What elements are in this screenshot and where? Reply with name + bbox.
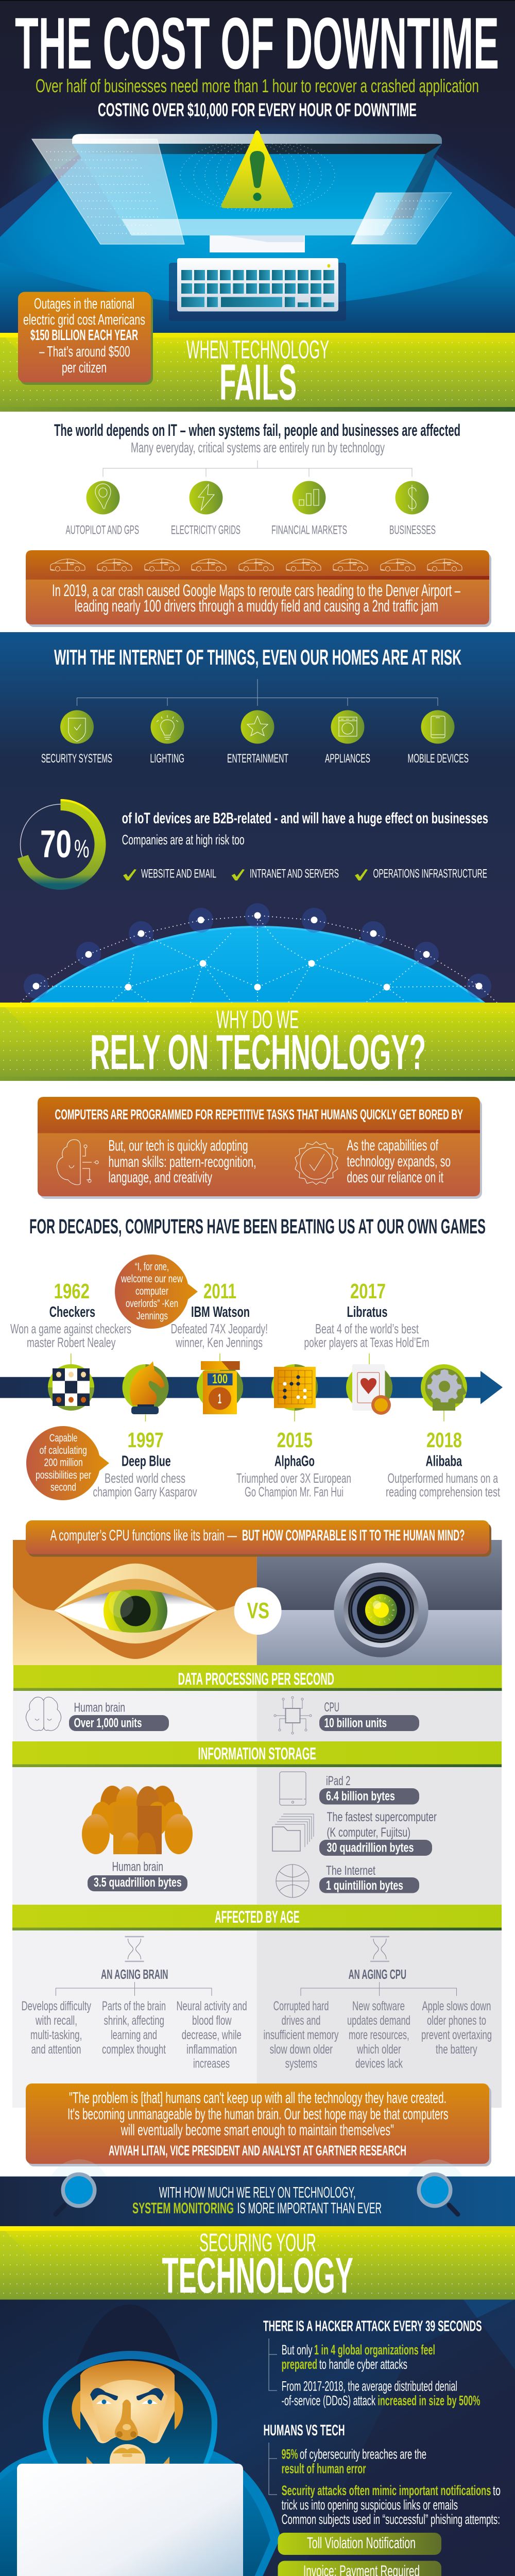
quote: Avivah Litan	[26, 2083, 491, 2166]
banner heading line: WHEN TECHNOLOGY	[186, 335, 329, 364]
text: brain effect shrink: Parts of the brain	[102, 1999, 166, 2013]
milestone: 2015 AlphaGo: Go Champion Mr. Fan Hui	[245, 1484, 344, 1499]
checklist: risk areas: INTRANET AND SERVERS	[250, 867, 339, 881]
panel: data processing per second	[13, 1665, 502, 1741]
icon: brain outline	[26, 1697, 61, 1731]
text: human skills: human skills: pattern-recognition,	[108, 1154, 256, 1171]
icon: iPad	[280, 1772, 306, 1805]
heading: aging brain: AN AGING BRAIN	[101, 1967, 168, 1982]
text: brain effect neural: decrease, while	[182, 2028, 242, 2042]
text: brain effect recall	[22, 1999, 91, 2057]
labels: critical systems: ELECTRICITY GRIDS	[171, 523, 241, 537]
text: capabilities: As the capabilities of	[347, 1137, 438, 1154]
icon: jeopardy podium	[197, 1361, 243, 1414]
text: iPad storage: iPad 2	[326, 1774, 350, 1788]
callout: national grid outages: Outages in the national	[34, 296, 134, 312]
callout: national grid outages: $150 BILLION EACH YEAR	[30, 327, 138, 344]
labels: IoT categories: MOBILE DEVICES	[408, 752, 469, 766]
icon: CPU chip	[274, 1697, 312, 1734]
labels: IoT categories: SECURITY SYSTEMS	[41, 752, 112, 766]
text: supercomputer storage: (K computer, Fujitsu)	[327, 1825, 410, 1840]
text: CPU effect software	[347, 1999, 410, 2071]
text: CPU effect Apple: the battery	[436, 2042, 477, 2057]
icon: go board	[271, 1364, 318, 1411]
callout: Deep Blue capability: of calculating	[39, 1445, 87, 1456]
milestone: 1962 Checkers: 1962	[54, 1279, 90, 1303]
milestone: 2011 IBM Watson	[171, 1279, 268, 1350]
text: internet storage: 1 quintillion bytes	[326, 1878, 403, 1893]
labels: IoT categories	[41, 752, 469, 766]
banner: system monitoring	[0, 2159, 515, 2226]
milestone: 1962 Checkers: master Robert Nealey	[27, 1334, 115, 1350]
icon: translucent window left	[32, 139, 184, 244]
text: attack stats: to handle cyber attacks	[319, 2357, 407, 2372]
milestone: 2017 Libratus: Libratus	[347, 1304, 387, 1320]
labels: IoT categories: APPLIANCES	[325, 752, 370, 766]
icon: badge check	[295, 1142, 338, 1184]
text: capabilities: technology expands, so	[347, 1153, 451, 1170]
icon: brain circuit	[57, 1140, 98, 1185]
labels: IoT categories: ENTERTAINMENT	[227, 752, 288, 766]
text: CPU effect hard drives: Corrupted hard	[273, 1999, 329, 2013]
subheading: critical systems: Many everyday, critical systems are entirely run by technology	[131, 439, 385, 455]
text: human brain storage: Human brain	[112, 1860, 163, 1874]
icon: businesses	[396, 481, 428, 514]
panel: data processing per second: DATA PROCESSING PER SECOND	[178, 1669, 334, 1688]
badge: VS: VS	[247, 1598, 269, 1623]
illustration: network dome	[21, 903, 497, 1003]
callout: national grid outages	[18, 292, 153, 385]
callout: national grid outages: electric grid cost Americans	[23, 312, 145, 328]
checklist: risk areas: WEBSITE AND EMAIL	[141, 867, 216, 881]
text: attack stats: prepared	[282, 2357, 317, 2372]
badge: VS	[234, 1587, 282, 1635]
text: human error stats: of cybersecurity breaches are the	[300, 2447, 426, 2462]
section banner: why do we rely on technology	[0, 1003, 515, 1081]
illustration: hooded hacker	[0, 2304, 281, 2576]
chart: 70 percent donut	[21, 800, 101, 885]
milestone: 2015 AlphaGo	[236, 1428, 351, 1499]
text: human brain speed: Over 1,000 units	[74, 1716, 142, 1730]
milestone: 2018 Alibaba: 2018	[426, 1428, 462, 1452]
text: brain effect recall: multi-tasking,	[30, 2028, 82, 2042]
text: CPU effect software: which older	[356, 2042, 401, 2057]
callout: national grid outages: – That’s around $500	[39, 344, 130, 360]
text: internet storage	[319, 1863, 419, 1893]
text: internet storage: The Internet	[326, 1863, 375, 1878]
labels: critical systems: FINANCIAL MARKETS	[271, 523, 347, 537]
icon: jeopardy podium: 1	[218, 1391, 221, 1406]
icon: autopilot and GPS	[87, 481, 119, 514]
icon: security systems	[60, 710, 94, 744]
text: CPU effect Apple	[421, 1999, 492, 2057]
section: internet of things	[0, 632, 515, 1003]
text: CPU effect hard drives: slow down older	[270, 2042, 333, 2057]
text: monitoring message: SYSTEM MONITORING	[132, 2200, 234, 2217]
text: supercomputer storage	[319, 1810, 437, 1856]
milestone: 1962 Checkers: Checkers	[49, 1304, 95, 1320]
text: brain effect neural	[176, 1999, 247, 2071]
section: hacker facts	[0, 2300, 515, 2576]
text: CPU effect hard drives: drives and	[282, 2013, 320, 2028]
icon: chess knight	[123, 1361, 169, 1414]
text: human brain speed: Human brain	[74, 1701, 125, 1715]
callout: Ken Jennings quote	[115, 1255, 198, 1329]
milestone: 2017 Libratus	[304, 1279, 430, 1350]
milestone: 2015 AlphaGo: 2015	[277, 1428, 313, 1452]
story text	[52, 581, 460, 615]
text: attack stats	[282, 2342, 480, 2408]
callout: Ken Jennings quote: Jennings	[136, 1310, 168, 1322]
callout: Ken Jennings quote: welcome our new	[121, 1273, 183, 1285]
text: brain effect shrink: complex thought	[102, 2042, 166, 2057]
text: brain effect neural: inflammation	[186, 2042, 237, 2057]
callout: Deep Blue capability: 200 million	[44, 1457, 83, 1468]
callout: Ken Jennings quote: overlords” -Ken	[126, 1298, 178, 1310]
section banner: securing your technology	[0, 2226, 515, 2303]
icon: mobile devices	[421, 710, 454, 744]
icon: entertainment	[241, 710, 274, 744]
text: human error stats: result of human error	[282, 2461, 366, 2477]
text: human brain speed	[69, 1701, 169, 1731]
text: human error stats	[282, 2447, 501, 2527]
milestone: 2017 Libratus: Beat 4 of the world’s best	[315, 1321, 419, 1336]
labels: critical systems: BUSINESSES	[389, 523, 436, 537]
icon: globe	[276, 1865, 309, 1897]
text: brain effect shrink	[102, 1999, 166, 2057]
text: CPU speed: CPU	[324, 1700, 339, 1715]
text: CPU effect Apple: older phones to	[427, 2013, 486, 2028]
chart: 70 percent donut: 70	[40, 822, 72, 866]
callout: Ken Jennings quote: “I, for one,	[135, 1261, 169, 1273]
text: human skills	[108, 1138, 256, 1186]
heading: humans vs tech: HUMANS VS TECH	[264, 2422, 345, 2439]
panel: affected by age: AFFECTED BY AGE	[215, 1907, 300, 1926]
heading: aging CPU: AN AGING CPU	[349, 1967, 406, 1982]
text: human error stats: to	[493, 2483, 501, 2498]
icon: head with gear	[421, 1364, 467, 1411]
icon: lighting	[150, 710, 184, 744]
text: CPU effect software: updates demand	[347, 2013, 410, 2028]
text: CPU effect software: New software	[352, 1999, 405, 2013]
labels: critical systems	[66, 523, 436, 537]
text: iPad storage	[319, 1774, 419, 1804]
milestone: 2011 IBM Watson: 2011	[203, 1279, 236, 1303]
milestone: 1997 Deep Blue	[93, 1428, 197, 1499]
text: human brain storage: 3.5 quadrillion bytes	[94, 1875, 182, 1890]
milestone: 2011 IBM Watson: Defeated 74X Jeopardy!	[171, 1321, 268, 1336]
callout: national grid outages: per citizen	[62, 360, 107, 376]
comparison: CPU lens panel	[257, 1540, 502, 1665]
icon: jeopardy podium: 100	[212, 1372, 228, 1386]
text: capabilities	[347, 1137, 451, 1186]
panel: information storage	[12, 1741, 502, 1905]
text: brain effect shrink: learning and	[111, 2028, 157, 2042]
text: companies risk: Companies are at high risk too	[122, 832, 245, 848]
text: monitoring message: WITH HOW MUCH WE RELY ON TECHNOLOGY,	[159, 2184, 356, 2201]
icon: keyboard	[169, 258, 346, 321]
text: human error stats: 95%	[282, 2447, 298, 2462]
icon: hourglass brain	[125, 1937, 144, 1961]
text: iPad storage: 6.4 billion bytes	[326, 1789, 395, 1803]
icon: computer monitor	[72, 134, 442, 252]
text: CPU effect software: devices lack	[355, 2057, 403, 2071]
labels: IoT categories: LIGHTING	[150, 752, 184, 766]
panel: car crash story	[26, 550, 491, 627]
icon: appliances	[331, 710, 365, 744]
text: attack stats: But only	[282, 2342, 313, 2358]
callout: Deep Blue capability	[26, 1426, 109, 1500]
text: monitoring message	[132, 2184, 382, 2217]
text: brain effect neural: increases	[193, 2057, 230, 2071]
milestone: 1962 Checkers: Won a game against checkers	[10, 1321, 131, 1336]
section banner: when technology fails	[0, 333, 515, 412]
milestone: 2017 Libratus: poker players at Texas Hold’Em	[304, 1334, 430, 1350]
milestone: 2015 AlphaGo: AlphaGo	[274, 1453, 315, 1469]
banner: CPU vs human mind	[26, 1520, 491, 1557]
timeline arrow	[0, 1371, 503, 1404]
text: CPU effect hard drives	[264, 1999, 339, 2071]
banner: CPU vs human mind: A computer’s CPU functions like its brain —	[50, 1527, 237, 1544]
milestone: 2018 Alibaba: Alibaba	[425, 1453, 462, 1469]
icon: financial markets	[293, 481, 325, 514]
text: CPU speed: 10 billion units	[324, 1716, 387, 1730]
milestone: 1997 Deep Blue: Deep Blue	[122, 1453, 171, 1469]
text: attack stats: -of-service (DDoS) attack	[282, 2393, 375, 2408]
text: CPU speed	[319, 1700, 419, 1731]
chart: 70 percent donut: %	[74, 835, 90, 863]
milestone: 1962 Checkers	[10, 1279, 131, 1350]
text: CPU effect software: more resources,	[349, 2028, 409, 2042]
button: invoice	[278, 2561, 441, 2576]
banner heading line: WHY DO WE	[216, 1006, 299, 1033]
checklist: risk areas	[123, 867, 487, 881]
milestone: 2011 IBM Watson: winner, Ken Jennings	[175, 1334, 263, 1350]
text: CPU effect hard drives: insufficient memory	[264, 2028, 339, 2042]
button: toll violation: Toll Violation Notification	[307, 2534, 416, 2552]
callout: Ken Jennings quote: computer	[135, 1285, 168, 1297]
callout: Deep Blue capability: possibilities per	[36, 1469, 91, 1481]
callout: Deep Blue capability: Capable	[49, 1432, 77, 1444]
icon: translucent window right	[351, 193, 452, 244]
text: brain effect neural: blood flow	[192, 2013, 232, 2028]
text: brain effect shrink: shrink, affecting	[104, 2013, 164, 2028]
text: attack stats: 1 in 4 global organizations feel	[314, 2342, 435, 2358]
labels: critical systems: AUTOPILOT AND GPS	[66, 523, 139, 537]
panel: information storage: INFORMATION STORAGE	[198, 1744, 316, 1763]
text: supercomputer storage: The fastest supercomputer	[327, 1810, 437, 1824]
milestone: 1997 Deep Blue: Bested world chess	[105, 1470, 185, 1486]
panel: repetitive tasks	[38, 1097, 482, 1199]
banner heading big word: FAILS	[219, 353, 297, 410]
text: CPU effect hard drives: systems	[285, 2057, 317, 2071]
milestone: 2017 Libratus: 2017	[350, 1279, 386, 1303]
comparison: human eye panel	[13, 1540, 257, 1665]
text: brain effect recall: Develops difficulty	[22, 1999, 91, 2013]
panel: affected by age	[12, 1905, 502, 2108]
icon: magnifier right	[417, 2172, 458, 2214]
icon: electricity grids	[190, 481, 222, 514]
text: human skills: But, our tech is quickly adopting	[108, 1138, 248, 1155]
icon: hourglass CPU	[370, 1937, 389, 1961]
text: human skills: language, and creativity	[108, 1169, 212, 1186]
timeline: computers vs humans at games	[0, 1255, 503, 1500]
icon: warning triangle	[221, 130, 293, 208]
banner heading line: SECURING YOUR	[199, 2229, 316, 2257]
milestone: 2018 Alibaba	[386, 1428, 501, 1499]
text: monitoring message: IS MORE IMPORTANT THAN EVER	[237, 2200, 382, 2217]
illustration: orange brain	[82, 1786, 193, 1854]
milestone: 1997 Deep Blue: 1997	[128, 1428, 164, 1452]
text: capabilities: does our reliance on it	[347, 1169, 443, 1186]
icon: file stack	[272, 1814, 314, 1851]
milestone: 2015 AlphaGo: Triumphed over 3X European	[236, 1470, 351, 1486]
banner heading big word: TECHNOLOGY	[162, 2247, 353, 2303]
callout: Deep Blue capability: second	[50, 1482, 76, 1494]
header panel	[0, 0, 515, 345]
icon: magnifier left	[56, 2172, 97, 2214]
milestone: 2011 IBM Watson: IBM Watson	[191, 1304, 250, 1320]
text: brain effect recall: and attention	[31, 2042, 81, 2057]
milestone: 1997 Deep Blue: champion Garry Kasparov	[93, 1484, 197, 1499]
text: brain effect neural: Neural activity and	[176, 1999, 247, 2013]
text: supercomputer storage: 30 quadrillion bytes	[327, 1840, 414, 1855]
text: brain effect recall: with recall,	[35, 2013, 77, 2028]
icon: checkers board	[48, 1364, 94, 1411]
button: toll violation	[278, 2533, 441, 2555]
icons: row of cars	[50, 559, 462, 571]
icon: playing card and chip	[346, 1364, 392, 1415]
text: human brain storage	[88, 1860, 187, 1891]
